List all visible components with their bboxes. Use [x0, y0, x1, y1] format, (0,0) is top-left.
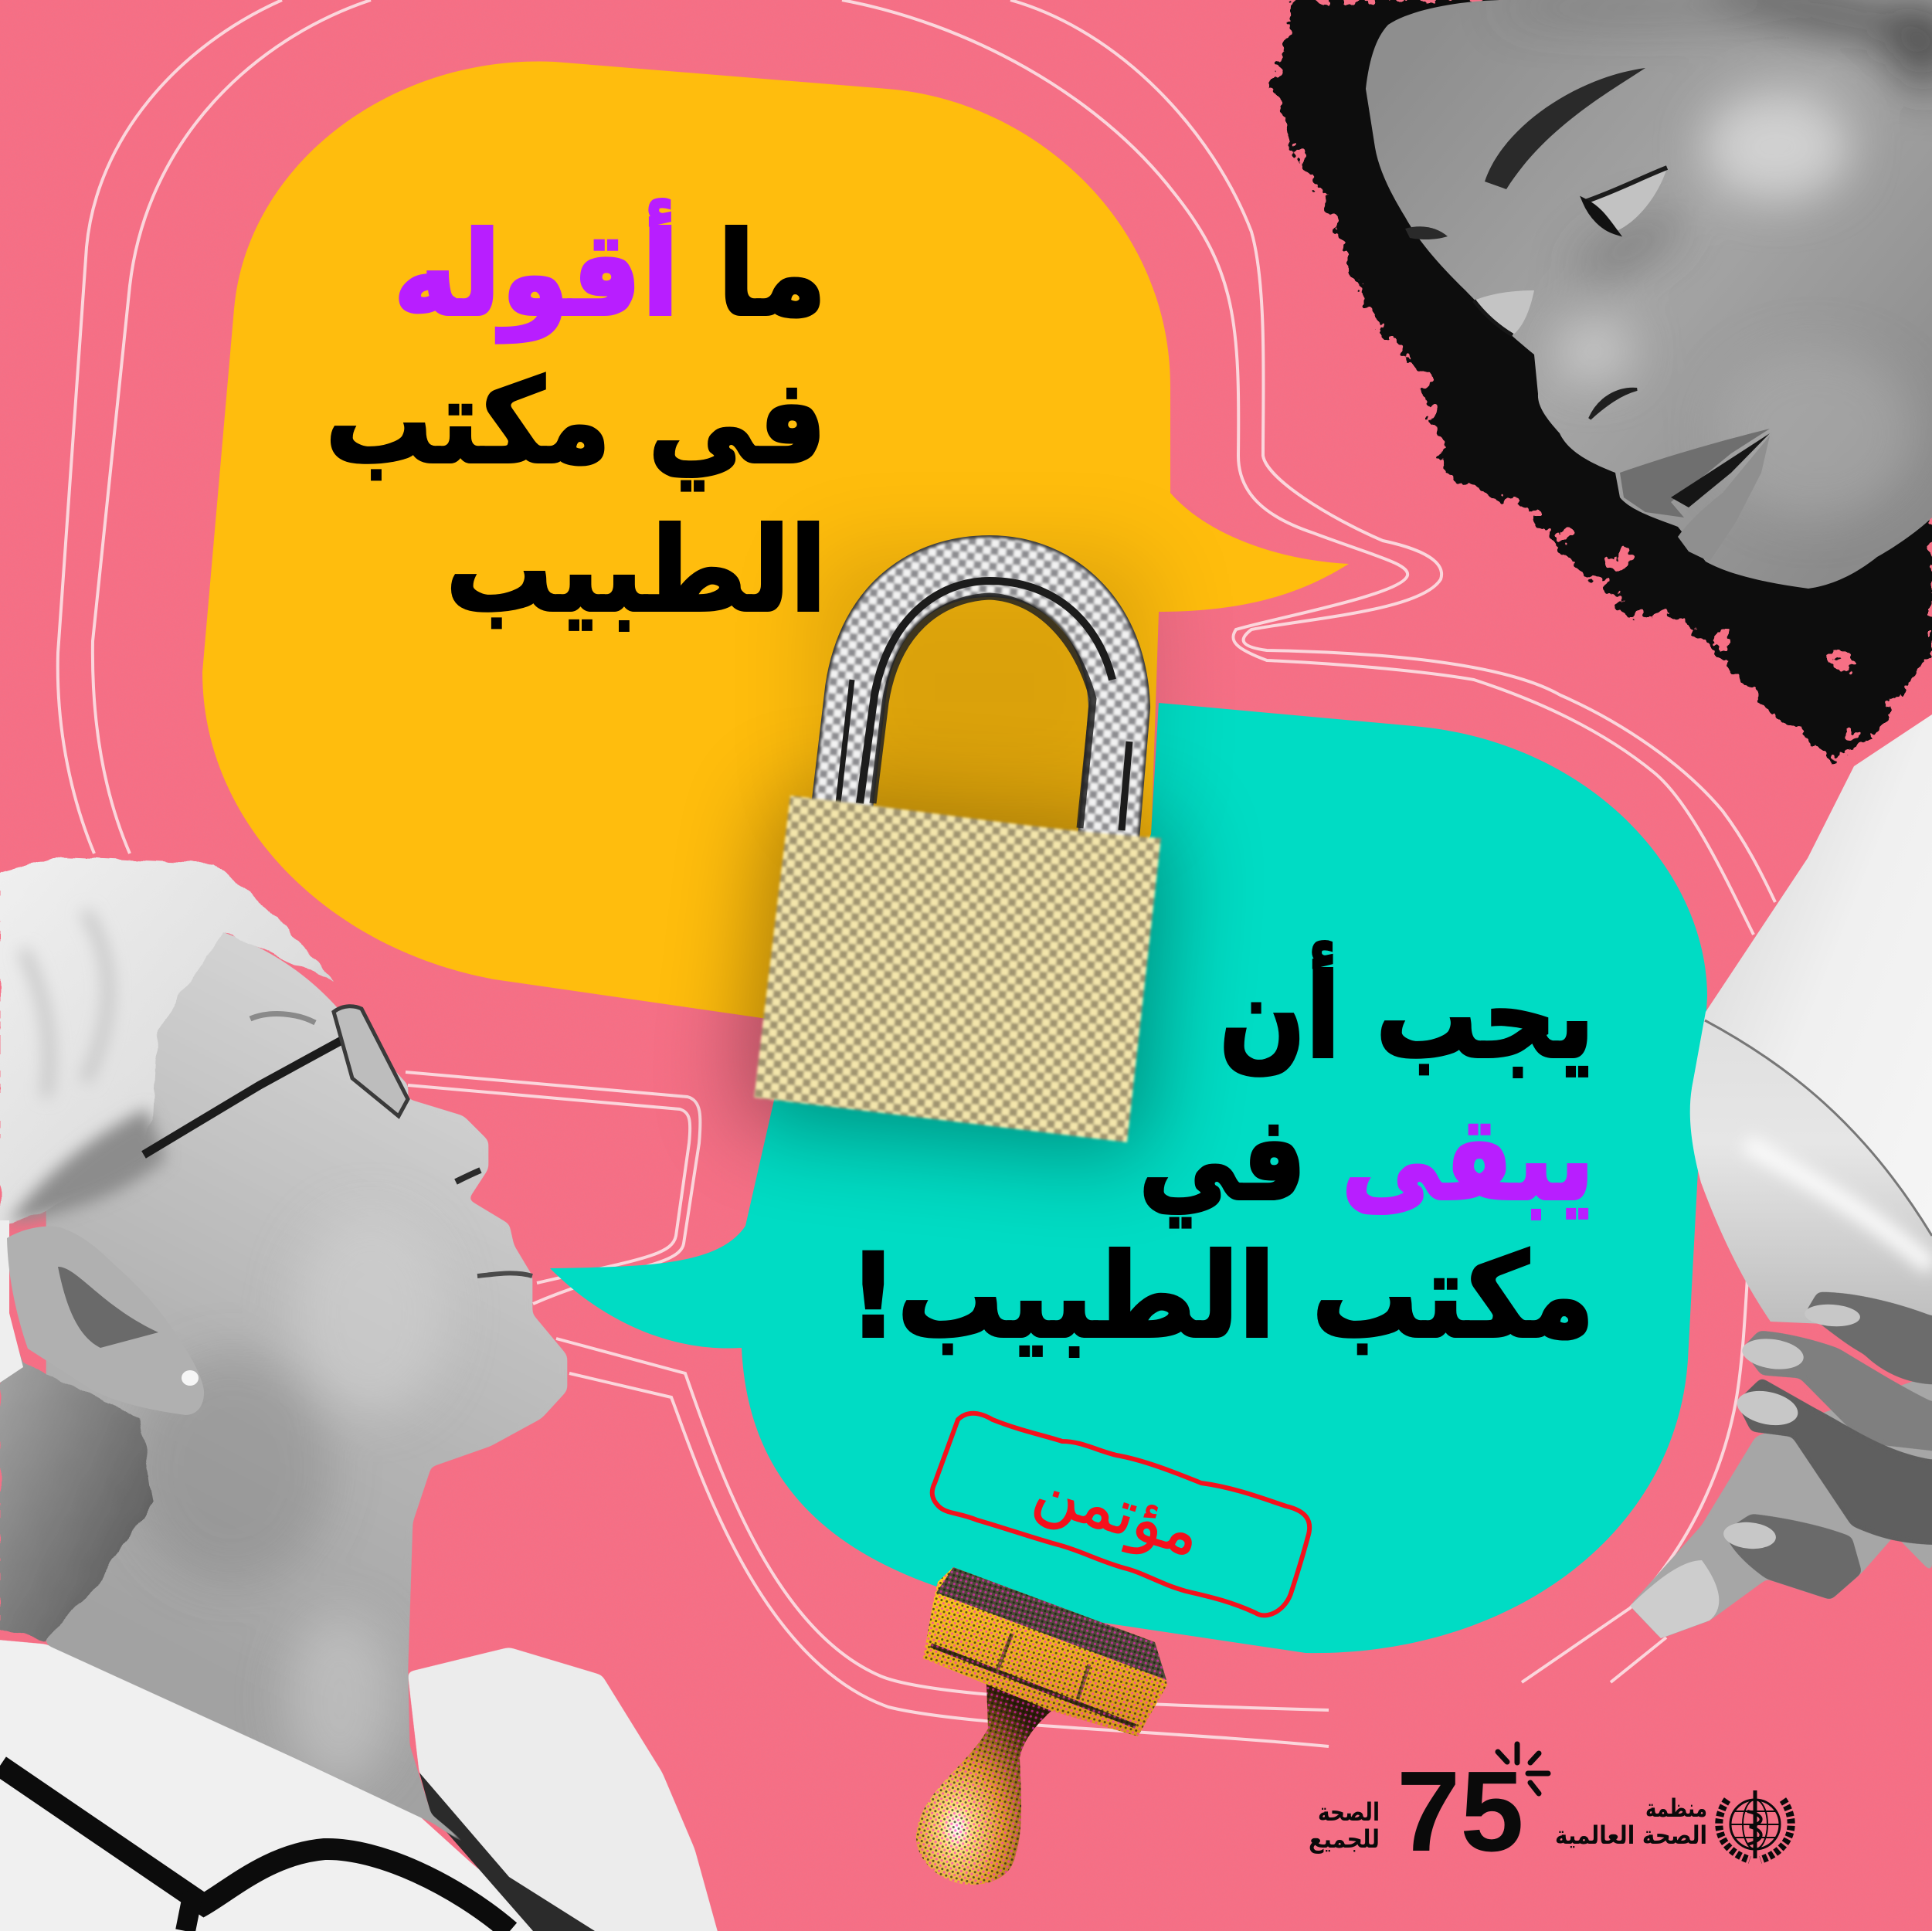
- middle finger: [1742, 1331, 1932, 1452]
- stamp imprint: confidential: [932, 1413, 1309, 1615]
- index finger: [1737, 1378, 1932, 1545]
- lower finger: [1724, 1514, 1862, 1600]
- padlock body: [754, 796, 1161, 1142]
- logo text: health for all: الصحة: [1318, 1797, 1380, 1827]
- coat: [0, 1637, 730, 1931]
- stamp handle: [916, 1683, 1051, 1885]
- heading: yellow bubble text: في مكتب: [325, 355, 827, 490]
- white hair strip: [0, 1220, 23, 1383]
- heading: teal bubble text: يبقى في: [1139, 1092, 1594, 1227]
- logo text: health for all: [1309, 1797, 1380, 1854]
- hair shading: [8, 911, 166, 1224]
- photo: woman top right: [1272, 0, 1932, 758]
- logo text: WHO name: الصحة العالمية: [1555, 1821, 1707, 1850]
- sleeve: [1690, 1020, 1932, 1329]
- hair: [1272, 0, 1932, 758]
- stamp block: [923, 1567, 1167, 1736]
- face shading: [138, 1240, 434, 1784]
- stethoscope: [0, 1766, 510, 1931]
- speech bubble: yellow: [202, 61, 1349, 1020]
- heading: yellow bubble text: الطبيب: [446, 504, 827, 638]
- logo: 75 years: 75: [1397, 1748, 1524, 1875]
- upper hair: [0, 856, 334, 1224]
- second eyebrow: [1405, 226, 1448, 239]
- fingernails: [1723, 1303, 1861, 1551]
- heading: yellow bubble text: [325, 199, 827, 638]
- photo: hand: [1630, 1292, 1932, 1638]
- logo text: WHO name: منظمة: [1645, 1794, 1707, 1823]
- lock shadow: [742, 556, 1174, 1159]
- eye: [1585, 168, 1667, 232]
- heading: yellow bubble text: ما أقوله: [393, 199, 827, 343]
- lower hair: [0, 1329, 153, 1641]
- face shading: [1543, 0, 1932, 516]
- eyebrow: [250, 1014, 315, 1023]
- stamp imprint: confidential: مؤتمن: [1027, 1451, 1210, 1571]
- photo: t-shirt: [1690, 714, 1932, 1329]
- glasses: [144, 1006, 408, 1155]
- rubber stamp: [916, 1567, 1167, 1885]
- padlock shackle: [838, 566, 1129, 838]
- face: [1366, 0, 1932, 589]
- logo text: health for all: للجميع: [1309, 1824, 1380, 1854]
- heading: teal bubble text: مكتب الطبيب!: [849, 1230, 1594, 1364]
- upper finger: [1805, 1292, 1932, 1384]
- mouth: [477, 1273, 532, 1276]
- eyebrow: [1485, 68, 1645, 189]
- icon: WHO emblem: [1719, 1790, 1791, 1860]
- logo rays: [1498, 1744, 1548, 1794]
- photo: doctor bottom left: [0, 856, 730, 1931]
- nostril: [456, 1170, 480, 1182]
- speech bubble: teal: [550, 703, 1707, 1653]
- heading: teal bubble text: [849, 942, 1594, 1364]
- logo text: WHO name: [1555, 1794, 1707, 1850]
- heading: teal bubble text: يجب أن: [1219, 942, 1594, 1084]
- lips: [1620, 429, 1770, 562]
- second eye: [1474, 290, 1534, 335]
- thumb and palm: [1630, 1375, 1932, 1638]
- face and neck: [46, 904, 567, 1870]
- ear: [7, 1227, 204, 1415]
- padlock: [754, 566, 1161, 1142]
- nostril: [1590, 389, 1637, 419]
- collar opening: [419, 1773, 595, 1931]
